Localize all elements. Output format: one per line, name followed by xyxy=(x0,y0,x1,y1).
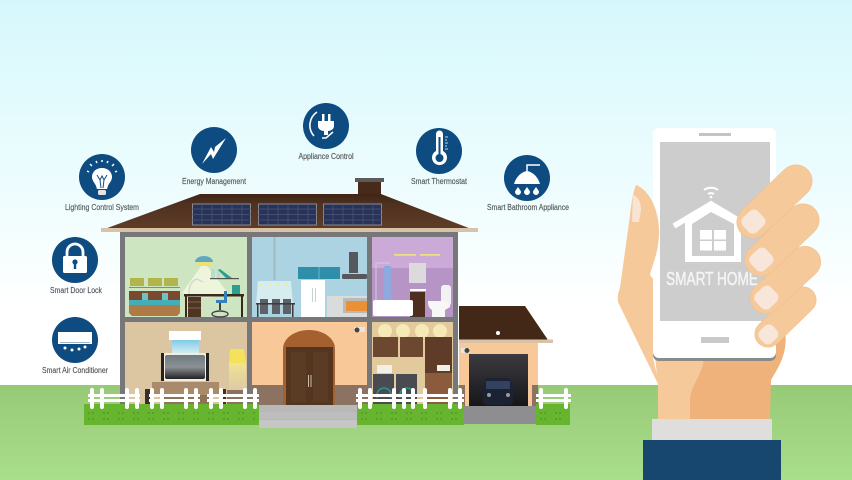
hedges xyxy=(84,404,570,425)
label: energy management: Energy Management xyxy=(182,177,247,186)
label: appliance control: Appliance Control xyxy=(298,152,354,161)
room: kitchen xyxy=(252,237,367,317)
label: lighting control system: Lighting Control System xyxy=(65,203,139,212)
solar panels xyxy=(192,204,382,225)
roof xyxy=(106,194,470,228)
icon: appliance control xyxy=(303,103,349,149)
icon: smart air conditioner xyxy=(52,317,98,363)
hand holding phone xyxy=(618,128,805,480)
house xyxy=(101,178,553,406)
label: smart bathroom appliance: Smart Bathroom Appliance xyxy=(487,203,569,212)
thumb xyxy=(618,185,660,388)
room: entrance hall xyxy=(252,322,367,405)
room: bedroom xyxy=(125,237,247,317)
fingernails xyxy=(739,207,781,347)
icon: smart bathroom appliance xyxy=(504,155,550,201)
room: laundry xyxy=(372,322,453,405)
chimney xyxy=(355,178,384,201)
wall frame xyxy=(120,232,458,405)
icon: smart door lock xyxy=(52,237,98,283)
front steps xyxy=(259,405,357,428)
label: smart air conditioner: Smart Air Conditioner xyxy=(42,366,108,375)
palm highlight xyxy=(655,355,704,419)
icon: smart thermostat xyxy=(416,128,462,174)
icon: lighting control system xyxy=(79,154,125,200)
jacket sleeve xyxy=(643,440,781,480)
background: lawn xyxy=(0,385,852,480)
fingers xyxy=(753,181,805,334)
room: bathroom xyxy=(372,237,453,317)
label: smart thermostat: Smart Thermostat xyxy=(411,177,468,186)
room: living room xyxy=(125,322,247,405)
smart home logo xyxy=(666,188,758,289)
label: smart door lock: Smart Door Lock xyxy=(50,286,103,295)
garage xyxy=(459,306,553,406)
icon: energy management xyxy=(191,127,237,173)
fence xyxy=(88,390,571,407)
eave xyxy=(101,228,478,232)
text: smart home: SMART HOME xyxy=(666,269,758,289)
security camera xyxy=(354,327,365,332)
shirt cuff xyxy=(652,419,772,440)
phone xyxy=(653,128,776,361)
hand back xyxy=(655,330,786,419)
driveway xyxy=(464,406,536,424)
